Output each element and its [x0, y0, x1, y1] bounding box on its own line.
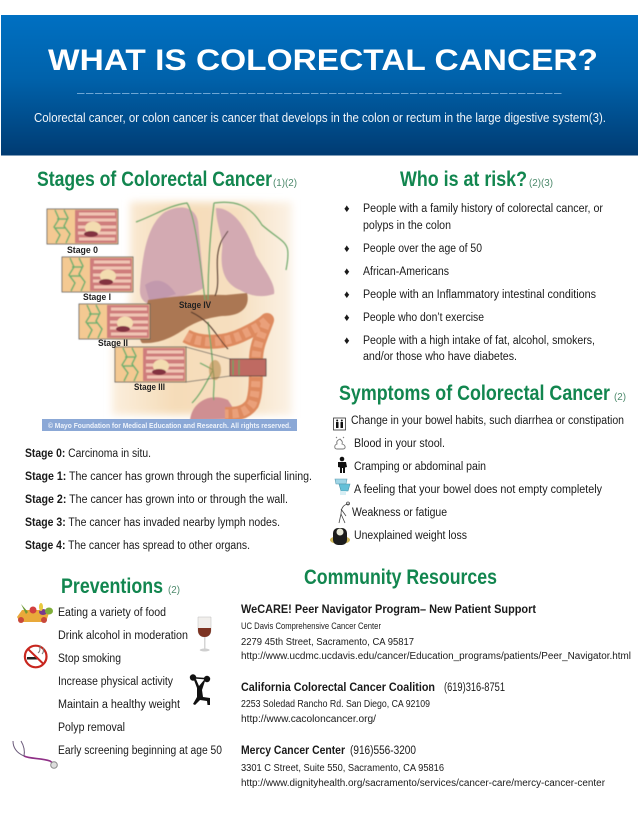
resource: California Colorectal Cancer Coalition: 2253 Soledad Rancho Rd. San Diego, CA 92109 [241, 699, 430, 710]
symptoms list: Cramping or abdominal pain [354, 461, 486, 473]
risk factors list: ♦ [344, 289, 350, 301]
stage descriptions: Stage 4: The cancer has spread to other organs. [25, 540, 250, 552]
symptoms list [351, 415, 624, 542]
resource: Mercy Cancer Center: (916)556-3200 [350, 745, 416, 757]
heading: stages: Stages of Colorectal Cancer [37, 168, 272, 191]
stage insets [47, 209, 186, 382]
icon: weightlifter [190, 674, 210, 705]
stage descriptions: Stage 0: Carcinoma in situ. [25, 448, 151, 460]
resource: Mercy Cancer Center: http://www.dignityhealth.org/sacramento/services/cancer-care/mercy-cancer-center [241, 778, 606, 789]
preventions list: Stop smoking [58, 653, 121, 665]
illustration: colorectal cancer stages anatomy [42, 202, 297, 431]
stage descriptions: Stage 3: The cancer has invaded nearby lymph nodes. [25, 517, 280, 529]
risk factors list: African-Americans [363, 266, 449, 278]
resource: Mercy Cancer Center: 3301 C Street, Suite 550, Sacramento, CA 95816 [241, 763, 444, 774]
resource: Mercy Cancer Center [241, 743, 606, 789]
stage labels: Stage II [98, 338, 128, 349]
stage descriptions: Stage 2: The cancer has grown into or through the wall. [25, 494, 288, 506]
liver [140, 293, 248, 343]
preventions list: Early screening beginning at age 50 [58, 745, 222, 757]
risk factors list: People over the age of 50 [363, 243, 482, 255]
icon: restroom sign [334, 418, 346, 430]
preventions list: Increase physical activity [58, 676, 173, 688]
symptoms list: Weakness or fatigue [352, 507, 447, 519]
icon: stethoscope [13, 741, 57, 768]
lymph lines [136, 202, 288, 403]
heading: symptoms: (2) [614, 392, 626, 403]
header banner [1, 15, 638, 156]
preventions list: Drink alcohol in moderation [58, 630, 188, 642]
colon [186, 320, 267, 414]
risk factors list: ♦ [344, 243, 350, 255]
heading: community resources: Community Resources [304, 566, 497, 589]
metastasis arrows [215, 231, 228, 296]
stage descriptions [25, 448, 312, 552]
risk factors list: ♦ [344, 203, 350, 215]
heading: preventions: Preventions [61, 575, 163, 598]
heading: preventions: (2) [168, 585, 180, 596]
resource: California Colorectal Cancer Coalition: http://www.cacoloncancer.org/ [241, 714, 376, 725]
stage labels: Stage I [83, 292, 111, 303]
icon: vegetables [17, 603, 53, 623]
image credit bar [42, 419, 297, 431]
symptoms list: A feeling that your bowel does not empty completely [354, 484, 602, 496]
risk factors list: and/or those who have diabetes. [363, 351, 517, 363]
symptoms list: Unexplained weight loss [354, 530, 467, 542]
stage labels: Stage IV [179, 300, 212, 311]
resource: WeCARE: UC Davis Comprehensive Cancer Center [241, 621, 381, 632]
stage labels: Stage 0 [67, 245, 98, 256]
preventions list [58, 607, 222, 757]
risk factors list: polyps in the colon [363, 220, 451, 232]
resource: California Colorectal Cancer Coalition [241, 680, 505, 725]
image credit bar: © Mayo Foundation for Medical Education and Research. All rights reserved. [48, 422, 291, 430]
stage descriptions: Stage 1: The cancer has grown through the superficial lining. [25, 471, 312, 483]
risk factors list: ♦ [344, 335, 350, 347]
resource: WeCARE [241, 602, 631, 662]
symptoms list: Blood in your stool. [354, 438, 445, 450]
stage labels: Stage III [134, 382, 165, 393]
resource: WeCARE: http://www.ucdmc.ucdavis.edu/cancer/Education_programs/patients/Peer_Navigator.html [241, 651, 631, 662]
resource: WeCARE: WeCARE! Peer Navigator Program– New Patient Support [241, 602, 536, 616]
title: WHAT IS COLORECTAL CANCER? [48, 44, 598, 77]
heading: who is at risk: (2)(3) [529, 178, 553, 189]
risk factors list: People with an Inflammatory intestinal conditions [363, 289, 596, 301]
risk factors list: People with a high intake of fat, alcohol, smokers, [363, 335, 595, 347]
risk factors list: ♦ [344, 312, 350, 324]
rectum [190, 397, 240, 420]
preventions list: Eating a variety of food [58, 607, 166, 619]
preventions list: Maintain a healthy weight [58, 699, 181, 711]
left lung [140, 207, 204, 304]
resource: California Colorectal Cancer Coalition: (619)316-8751 [444, 682, 505, 694]
risk factors list: ♦ [344, 266, 350, 278]
resource: California Colorectal Cancer Coalition: California Colorectal Cancer Coalition [241, 680, 435, 694]
risk factors list: People with a family history of colorectal cancer, or [363, 203, 603, 215]
risk factors list [344, 203, 603, 363]
icon: toilet [335, 479, 350, 495]
stage labels [67, 245, 212, 393]
zoom callout [186, 347, 230, 382]
heading: who is at risk: Who is at risk? [400, 168, 527, 191]
icon: no smoking sign [25, 646, 46, 667]
icon: wine glass [198, 617, 211, 652]
icon: stool [335, 437, 345, 449]
risk factors list: People who don’t exercise [363, 312, 484, 324]
icon: person cramping [338, 457, 347, 473]
right lung [216, 208, 274, 296]
resource: WeCARE: 2279 45th Street, Sacramento, CA 95817 [241, 637, 414, 648]
icon: weight scale [330, 528, 350, 545]
resource: Mercy Cancer Center: Mercy Cancer Center [241, 743, 345, 757]
preventions list: Polyp removal [58, 722, 125, 734]
icon: fatigued figure [339, 502, 350, 523]
heading: stages: (1)(2) [273, 178, 297, 189]
